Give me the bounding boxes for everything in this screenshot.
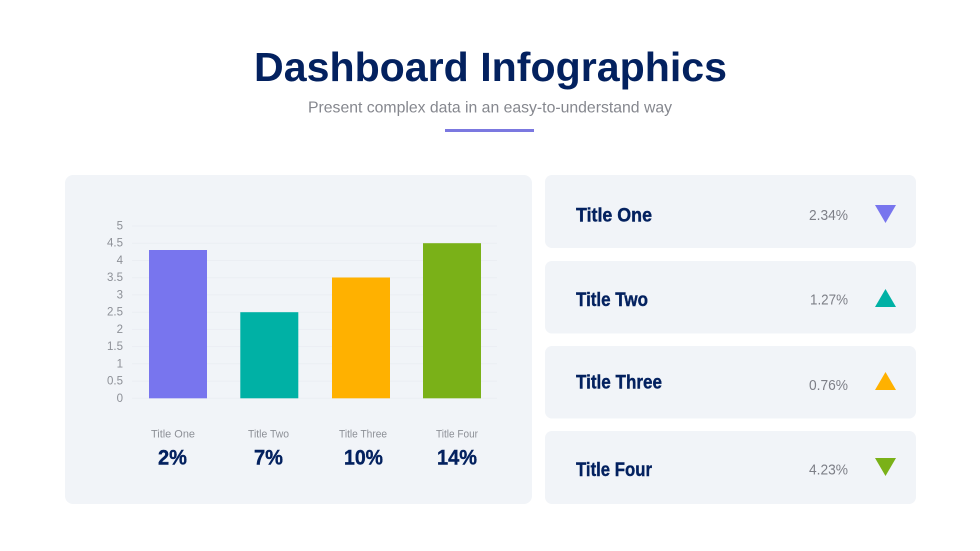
card: Title Three	[545, 346, 916, 418]
card: Title One	[545, 175, 916, 248]
icon: down triangle	[875, 205, 896, 223]
bar: Title Four	[423, 243, 481, 398]
card: Title Three: Title Three	[576, 373, 662, 394]
card: Title One: Title One	[576, 206, 652, 227]
category: Title Four: Title Four	[436, 428, 478, 440]
y axis labels	[107, 220, 124, 405]
category: Title One	[151, 428, 195, 470]
category: Title Two: 7%	[254, 446, 283, 470]
category: Title One: Title One	[151, 428, 195, 440]
bar: Title One	[149, 250, 207, 398]
card: Title One: 2.34%	[809, 208, 848, 224]
card: Title Four: 4.23%	[809, 463, 848, 479]
y axis labels: 2	[117, 324, 123, 336]
icon: up triangle	[875, 372, 896, 390]
panel: bar chart	[65, 175, 532, 504]
title underline	[445, 129, 534, 132]
category: Title Two: Title Two	[248, 428, 289, 440]
y axis labels: 4	[117, 255, 124, 267]
y axis labels: 1	[117, 358, 123, 370]
card: Title Three: 0.76%	[809, 378, 848, 394]
y axis labels: 0	[117, 393, 123, 405]
category: Title Three	[339, 428, 387, 470]
category: Title Three: 10%	[344, 446, 383, 470]
y axis labels: 3.5	[107, 272, 123, 284]
bar: Title Two	[240, 312, 298, 398]
icon: up triangle	[875, 289, 896, 307]
y axis labels: 2.5	[107, 307, 123, 319]
card: Title Two: 1.27%	[810, 293, 848, 309]
y axis labels: 1.5	[107, 341, 123, 353]
category: Title One: 2%	[158, 446, 187, 470]
icon: down triangle	[875, 458, 896, 476]
card: Title Two	[545, 261, 916, 334]
panel background	[65, 175, 532, 504]
y axis labels: 5	[117, 220, 123, 232]
header	[254, 44, 727, 132]
bar chart	[107, 220, 497, 405]
card: Title Four	[545, 431, 916, 504]
y axis labels: 4.5	[107, 238, 123, 250]
subtitle: Present complex data in an easy-to-understand way	[308, 100, 672, 116]
card: Title Four: Title Four	[576, 460, 653, 481]
card: Title Two: Title Two	[576, 290, 648, 311]
category: Title Three: Title Three	[339, 428, 387, 440]
category: Title Two	[248, 428, 289, 470]
title: Dashboard Infographics	[254, 44, 727, 90]
category: Title Four	[436, 428, 478, 470]
y axis labels: 3	[117, 289, 123, 301]
y axis labels: 0.5	[107, 376, 123, 388]
category: Title Four: 14%	[437, 446, 477, 470]
bar: Title Three	[332, 278, 390, 398]
